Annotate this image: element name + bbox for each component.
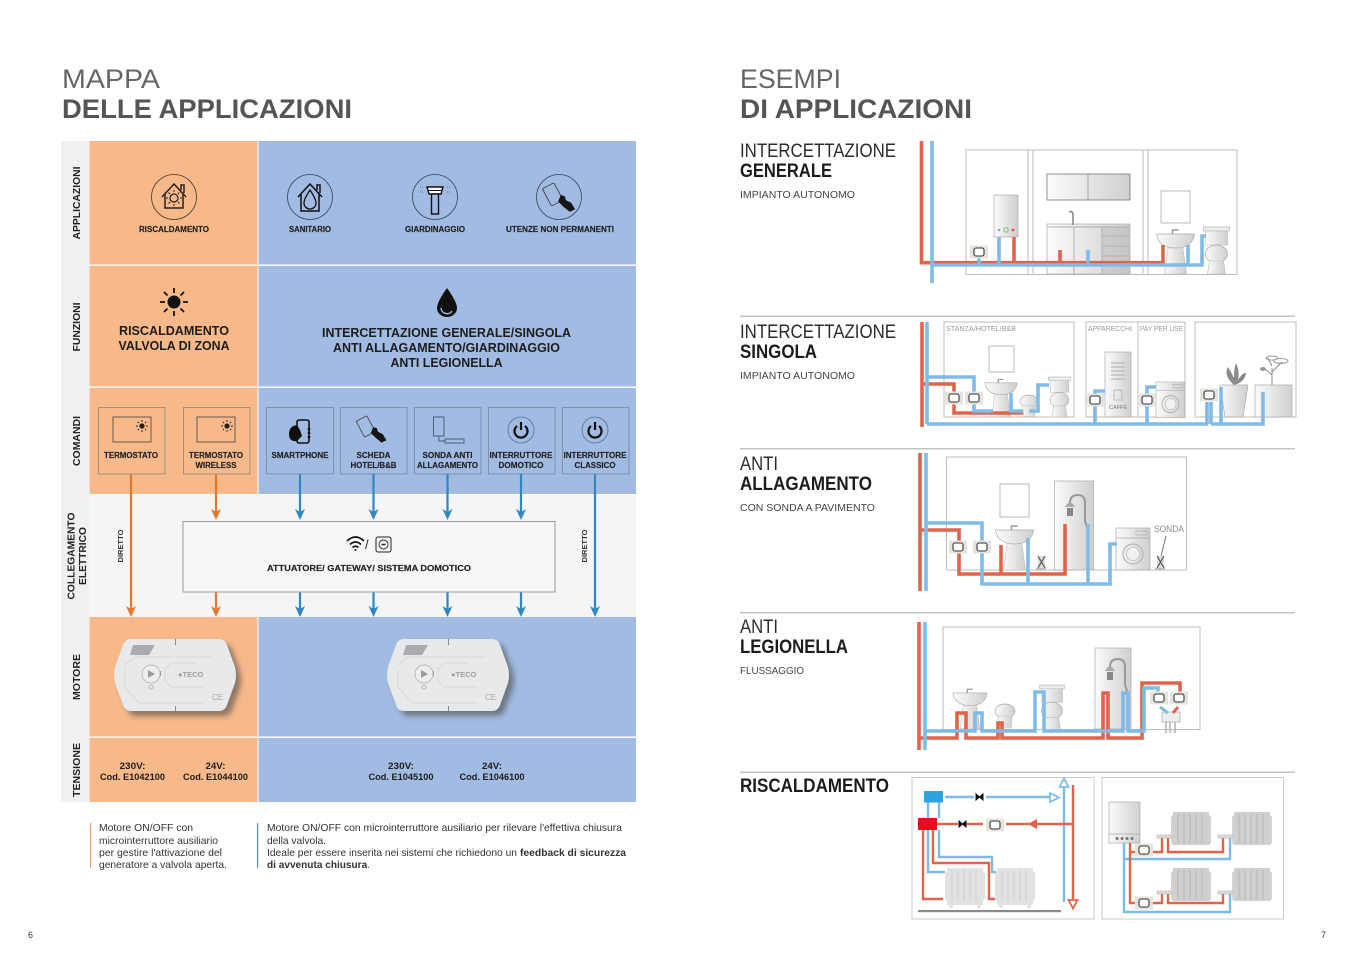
section dividers: [740, 316, 1295, 773]
panel: blue upper cells: [258, 141, 636, 494]
panel: motor and voltage orange cells: [90, 617, 258, 802]
section heading: riscaldamento: RISCALDAMENTO: [740, 776, 889, 797]
icon: water drop: [437, 288, 457, 317]
section heading: intercettazione singola: [740, 322, 896, 382]
row labels: ELETTRICO: [78, 527, 89, 585]
function text: heating: [118, 323, 230, 353]
row labels: MOTORE: [72, 654, 83, 700]
section heading: intercettazione generale: [740, 141, 896, 201]
command: classic switch: INTERRUTTORE: [564, 451, 627, 460]
diagram: intercettazione singola: STANZA/HOTEL/B&B: [946, 324, 1016, 333]
panel: application map table: [61, 141, 636, 802]
section heading: anti legionella: ANTI: [740, 617, 778, 638]
note: orange motor description: generatore a valvola aperta.: [99, 859, 227, 871]
icon: sun: [160, 288, 188, 316]
note: blue motor description: della valvola.: [267, 835, 326, 847]
application labels: GIARDINAGGIO: [405, 225, 465, 234]
slash: /: [365, 537, 369, 552]
gateway label: ATTUATORE/ GATEWAY/ SISTEMA DOMOTICO: [267, 564, 471, 573]
section heading: anti legionella: [740, 617, 848, 677]
diagram: intercettazione singola: APPARECCHI: [1088, 324, 1132, 333]
note: orange motor description: [90, 822, 227, 871]
diagram: heating boiler: [1102, 778, 1284, 919]
function text: water: [322, 325, 572, 370]
function text: water: INTERCETTAZIONE GENERALE/SINGOLA: [322, 325, 572, 340]
panel: motor and voltage blue cells: [258, 617, 636, 802]
note: orange motor description: per gestire l'attivazione del: [99, 847, 222, 859]
application labels: SANITARIO: [289, 225, 331, 234]
title: esempi di applicazioni: [740, 64, 972, 124]
section heading: intercettazione generale: IMPIANTO AUTONOMO: [740, 189, 855, 201]
row labels: TENSIONE: [72, 743, 83, 797]
direct labels: DIRETTO: [118, 529, 125, 562]
motor: orange cell: [114, 639, 241, 716]
command: termostato wireless: [184, 408, 250, 474]
panel: orange upper cells: [90, 141, 258, 494]
direct labels: DIRETTO: [582, 529, 589, 562]
command: flood probe: ALLAGAMENTO: [417, 461, 478, 470]
arrows: blue: [295, 474, 600, 617]
row labels: [66, 166, 89, 797]
command: flood probe: SONDA ANTI: [422, 451, 472, 460]
panel: electrical connection band: [89, 495, 636, 617]
row labels: COLLEGAMENTO: [66, 512, 78, 600]
gateway box: [183, 522, 555, 592]
section heading: anti allagamento: ANTI: [740, 454, 778, 475]
diagram: anti allagamento: [920, 453, 1186, 591]
command: hotel card: HOTEL/B&B: [350, 461, 397, 470]
title: mappa delle applicazioni: [62, 64, 352, 124]
diagram: intercettazione singola: [922, 322, 1296, 427]
section heading: intercettazione generale: INTERCETTAZIONE: [740, 141, 896, 162]
application labels: RISCALDAMENTO: [139, 225, 209, 234]
voltage codes: blue: [368, 761, 524, 783]
icon: smart plug: [376, 537, 391, 552]
command: hotel card: [340, 408, 407, 474]
diagram: intercettazione singola: CAFFÈ: [1109, 404, 1127, 411]
note: blue motor description: Motore ON/OFF con microinterruttore ausiliario per rilevare l'effettiva chiusura: [267, 822, 622, 834]
command: flood probe: [414, 408, 481, 474]
application labels: [139, 225, 614, 234]
command: home automation switch: DOMOTICO: [498, 461, 544, 470]
voltage codes: orange: 24V:: [206, 761, 226, 772]
row labels: APPLICAZIONI: [72, 166, 83, 240]
function text: heating: RISCALDAMENTO: [119, 323, 229, 338]
command: classic switch: [562, 408, 629, 474]
command: termostato: TERMOSTATO: [104, 451, 158, 460]
page number left: 6: [28, 930, 33, 940]
row labels: FUNZIONI: [72, 302, 83, 351]
command: termostato: [98, 408, 165, 474]
motor: blue cell: [387, 639, 514, 716]
command: classic switch: CLASSICO: [574, 461, 616, 470]
diagram: intercettazione generale: [922, 141, 1237, 283]
note: blue motor description: di avvenuta chiusura.: [267, 859, 370, 871]
diagram: anti legionella: [919, 622, 1200, 750]
icon: wifi: [347, 537, 364, 551]
icon: garden sprinkler: [412, 174, 458, 220]
section heading: anti legionella: LEGIONELLA: [740, 637, 848, 658]
command: smartphone: [266, 408, 334, 474]
voltage codes: blue: Cod. E1045100: [368, 772, 434, 783]
section heading: intercettazione generale: GENERALE: [740, 161, 832, 182]
command: smartphone: SMARTPHONE: [272, 451, 329, 460]
command: hotel card: SCHEDA: [356, 451, 391, 460]
note: blue motor description: Ideale per essere inserita nei sistemi che richiedono un: [267, 847, 517, 859]
icon: sanitary house: [288, 174, 332, 220]
title: esempi di applicazioni: ESEMPI: [740, 64, 841, 94]
icon: card and hand: [536, 174, 582, 220]
command: home automation switch: [488, 408, 555, 474]
direct labels: [118, 529, 589, 562]
note: blue motor description: [257, 822, 626, 871]
application labels: UTENZE NON PERMANENTI: [506, 225, 614, 234]
section heading: anti allagamento: ALLAGAMENTO: [740, 474, 872, 495]
title: mappa delle applicazioni: MAPPA: [62, 64, 160, 94]
icon: heating house: [152, 174, 196, 220]
title: esempi di applicazioni: DI APPLICAZIONI: [740, 94, 972, 124]
section heading: intercettazione singola: IMPIANTO AUTONOMO: [740, 370, 855, 382]
section heading: intercettazione singola: INTERCETTAZIONE: [740, 322, 896, 343]
page number right: 7: [1321, 930, 1326, 940]
diagram: anti allagamento: SONDA: [1154, 524, 1184, 534]
row labels: COMANDI: [72, 416, 83, 466]
diagram: heating manifold: [912, 778, 1094, 919]
title: mappa delle applicazioni: DELLE APPLICAZIONI: [62, 94, 352, 124]
arrows: orange: [126, 474, 221, 617]
section heading: anti legionella: FLUSSAGGIO: [740, 665, 804, 677]
diagram: intercettazione singola: PAY PER USE: [1140, 324, 1183, 333]
voltage codes: orange: 230V:: [120, 761, 146, 772]
note: orange motor description: microinterruttore ausiliario: [99, 835, 218, 847]
section heading: intercettazione singola: SINGOLA: [740, 342, 817, 363]
function text: water: ANTI ALLAGAMENTO/GIARDINAGGIO: [333, 340, 560, 355]
voltage codes: orange: Cod. E1042100: [100, 772, 165, 783]
row label column: [61, 141, 89, 802]
voltage codes: blue: Cod. E1046100: [460, 772, 524, 783]
note: blue motor description: feedback di sicurezza: [520, 847, 626, 859]
function text: heating: VALVOLA DI ZONA: [118, 338, 230, 353]
command: termostato wireless: WIRELESS: [196, 461, 237, 470]
command: home automation switch: INTERRUTTORE: [490, 451, 553, 460]
voltage codes: blue: 230V:: [388, 761, 414, 772]
note: orange motor description: Motore ON/OFF con: [99, 822, 193, 834]
function text: water: ANTI LEGIONELLA: [390, 355, 503, 370]
section heading: anti allagamento: CON SONDA A PAVIMENTO: [740, 502, 875, 514]
voltage codes: orange: Cod. E1044100: [183, 772, 248, 783]
command: termostato wireless: TERMOSTATO: [189, 451, 243, 460]
voltage codes: orange: [100, 761, 248, 783]
voltage codes: blue: 24V:: [482, 761, 502, 772]
section heading: anti allagamento: [740, 454, 875, 514]
